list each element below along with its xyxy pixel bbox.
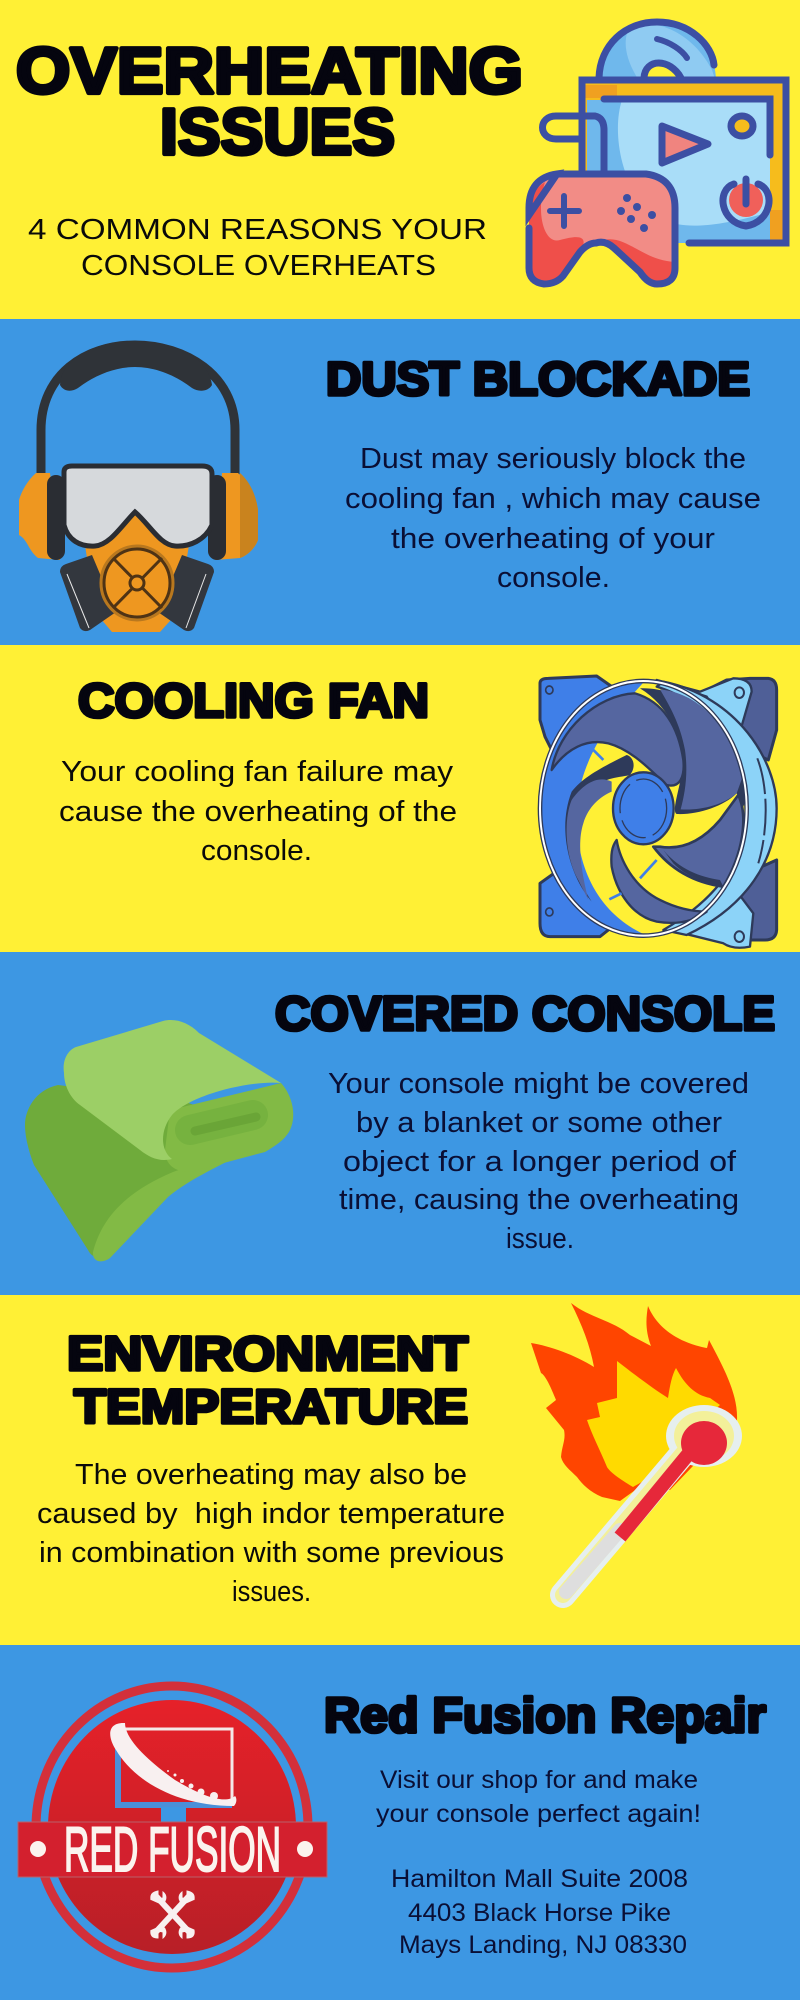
panel: cooling fan bbox=[0, 645, 800, 952]
text: covered console body: issue. bbox=[506, 1223, 574, 1255]
text: shop invitation: your console perfect again! bbox=[376, 1800, 701, 1828]
logo: red fusion bbox=[18, 1686, 327, 1968]
icon: cooling fan bbox=[540, 676, 777, 948]
text: dust blockade body: console. bbox=[497, 562, 610, 594]
heading: red fusion repair: Red Fusion Repair bbox=[324, 1689, 766, 1743]
text: dust blockade body: the overheating of your bbox=[391, 523, 715, 555]
text: shop invitation: Visit our shop for and make bbox=[380, 1766, 698, 1794]
subtitle bbox=[28, 214, 487, 282]
text: address: Hamilton Mall Suite 2008 bbox=[391, 1865, 688, 1893]
panel: environment temperature bbox=[0, 1295, 800, 1645]
heading: dust blockade: DUST BLOCKADE bbox=[326, 352, 750, 405]
text: covered console body bbox=[328, 1068, 749, 1255]
panel: header bbox=[0, 0, 800, 319]
text: cooling fan body: console. bbox=[201, 835, 312, 867]
subtitle: 4 COMMON REASONS YOUR bbox=[28, 214, 487, 246]
text: dust blockade body: Dust may seriously block the bbox=[360, 443, 746, 475]
heading: covered console: COVERED CONSOLE bbox=[275, 988, 775, 1041]
icon: game console and controller bbox=[529, 21, 788, 284]
heading: environment temperature: TEMPERATURE bbox=[74, 1381, 468, 1434]
text: address bbox=[391, 1865, 688, 1959]
text: environment temperature body: caused by high indor temperature bbox=[37, 1498, 505, 1530]
text: cooling fan body: Your cooling fan failure may bbox=[61, 756, 454, 788]
icon: rolled blanket bbox=[25, 1020, 293, 1261]
text: address: 4403 Black Horse Pike bbox=[408, 1899, 671, 1927]
heading: environment temperature bbox=[67, 1328, 468, 1434]
text: cooling fan body bbox=[59, 756, 457, 867]
icon: respirator mask with goggles and ear muffs bbox=[19, 341, 258, 632]
text: environment temperature body: in combination with some previous bbox=[39, 1537, 504, 1569]
text: dust blockade body: cooling fan , which may cause bbox=[345, 483, 761, 515]
text: covered console body: time, causing the overheating bbox=[339, 1184, 739, 1216]
panel: dust blockade bbox=[0, 319, 800, 645]
panel: covered console bbox=[0, 952, 800, 1295]
text: environment temperature body: issues. bbox=[232, 1576, 311, 1608]
heading: cooling fan: COOLING FAN bbox=[78, 675, 429, 728]
text: covered console body: Your console might be covered bbox=[328, 1068, 749, 1100]
title: OVERHEATING bbox=[16, 34, 523, 107]
text: environment temperature body: The overheating may also be bbox=[75, 1459, 467, 1491]
text: covered console body: by a blanket or some other bbox=[356, 1107, 722, 1139]
text: address: Mays Landing, NJ 08330 bbox=[399, 1931, 687, 1959]
subtitle: CONSOLE OVERHEATS bbox=[81, 250, 436, 282]
icon: thermometer in flame bbox=[531, 1303, 742, 1595]
heading: environment temperature: ENVIRONMENT bbox=[67, 1328, 468, 1381]
logo: red fusion: RED FUSION bbox=[64, 1815, 281, 1885]
text: cooling fan body: cause the overheating of the bbox=[59, 796, 457, 828]
text: covered console body: object for a longer period of bbox=[343, 1146, 737, 1178]
panel: red fusion repair bbox=[0, 1645, 800, 2000]
title: ISSUES bbox=[160, 95, 395, 168]
text: environment temperature body bbox=[37, 1459, 505, 1608]
text: dust blockade body bbox=[345, 443, 761, 594]
title bbox=[16, 34, 523, 168]
text: shop invitation bbox=[376, 1766, 701, 1828]
